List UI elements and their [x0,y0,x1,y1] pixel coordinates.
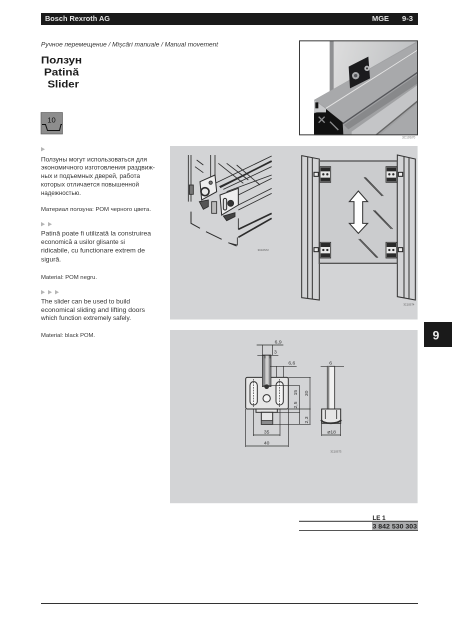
text block: Russian: экономичного изготовления раздвиж- [41,165,155,172]
header bar [41,13,418,25]
order table: 3 842 530 303 [372,524,417,530]
icon: double-headed arrow [349,191,368,233]
title: Ползун [41,54,82,66]
drawing: slider dimensions: 35 [264,430,270,436]
drawing: slider on sliding door, perspective: 3C10S72 [258,248,269,252]
icon: slot size 10: 10 [47,116,56,124]
drawing: slider dimensions: 6,6 [288,361,295,367]
drawing: slider dimensions: 3C10S73 [330,449,342,453]
photo code: 3C10S70 [402,136,416,140]
header bar: MGE [372,16,389,23]
drawing: slider dimensions: 40 [264,441,270,447]
drawing: slider dimensions: 2,3 [304,416,310,423]
text block: English: which function extremely safely. [40,315,131,322]
text block: Romanian [41,222,151,281]
chapter tab: 9 [433,328,440,342]
header bar: Bosch Rexroth AG [45,16,111,23]
drawing: slider dimensions: 15 [293,390,299,395]
text block: Russian: надежностью. [41,190,81,197]
title [41,54,82,90]
text block: English: The slider can be used to build [41,298,130,306]
icon: slot size 10 [41,112,62,134]
text block: Romanian: sigură. [41,256,61,264]
text block: Russian [41,147,155,213]
text block: Russian: которых отличается повышенной [41,180,139,188]
section subtitle: Ручное перемещение / Mișcări manuale / Manual movement [41,42,218,48]
text block: English: economical sliding and lifting doors [41,307,145,314]
order table [299,515,418,531]
text block: Russian: Материал ползуна: POM черного цвета. [41,207,151,213]
title: Slider [48,78,79,90]
text block: Romanian: ridicabile, cu functionare extrem de [41,247,145,254]
text block: Russian: Ползуны могут использоваться для [41,156,148,164]
panel: application drawings [170,146,418,320]
title: Patină [44,66,79,78]
drawing: slider dimensions: 6,9 [275,340,282,346]
drawing: slider dimensions: ⌀18 [327,429,336,435]
drawing: slider dimensions [246,340,344,453]
drawing: slider dimensions: 6 [329,361,332,367]
text block: English [40,290,145,339]
text block: Romanian: economică a usilor glisante si [41,239,125,246]
text block: Russian: ных и подъемных дверей, работа [41,172,140,180]
panel: dimension drawing [170,330,418,503]
drawing: slider dimensions: 30 [304,390,310,396]
header bar: 9-3 [402,16,413,23]
drawing: door with four sliders and arrow [302,155,415,306]
order table: LE 1 [372,515,386,522]
photo: slider on aluminium profile [299,41,418,135]
chapter tab [424,322,452,347]
drawing: slider dimensions: 2,5 [293,401,299,408]
drawing: slider on sliding door, perspective [188,155,272,252]
footer rule [41,603,418,604]
text block: Romanian: Patină poate fi utilizată la construirea [41,230,151,237]
text block: Romanian: Material: POM negru. [41,275,97,281]
drawing: door with four sliders and arrow: 3C10S74 [403,302,415,306]
text block: English: Material: black POM. [41,333,95,339]
drawing: slider dimensions: 3 [274,349,277,355]
